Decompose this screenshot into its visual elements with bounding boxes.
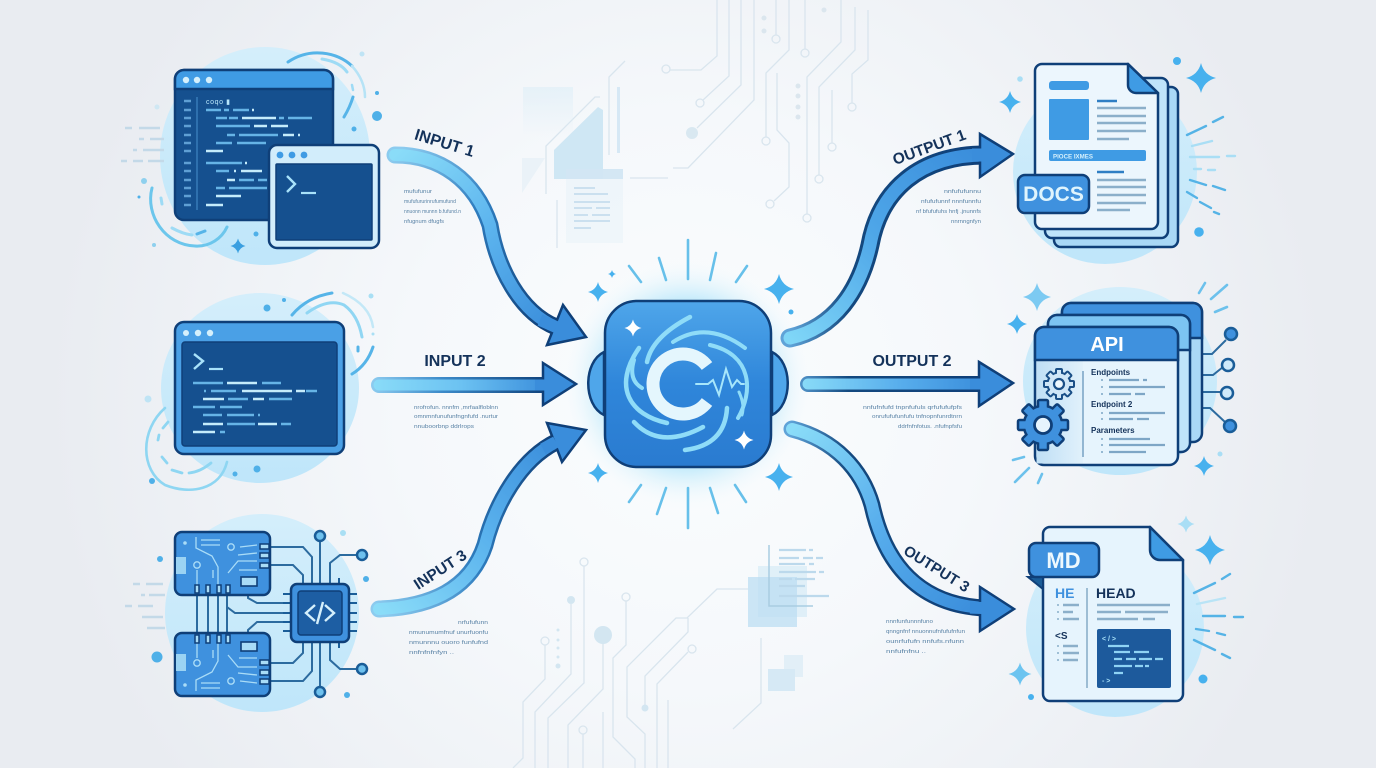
caption: input 1: nfugnum dfugfs bbox=[404, 219, 444, 225]
swirl logo bbox=[626, 317, 747, 450]
backdrop blob bbox=[161, 293, 359, 483]
caption: output 3: qnngnfnf nnuonnufnfufufnfun bbox=[886, 629, 965, 635]
central processor icon bbox=[559, 240, 815, 528]
caption: input 3: nrfufufunn bbox=[458, 620, 488, 626]
processor chip bbox=[283, 578, 357, 648]
label: output 3: OUTPUT 3 bbox=[900, 542, 972, 596]
terminal window bbox=[269, 145, 379, 248]
connector lines bbox=[1190, 340, 1226, 422]
connecting traces bbox=[197, 541, 358, 688]
rays bbox=[629, 240, 747, 528]
front api panel: API bbox=[1090, 334, 1124, 356]
code block bbox=[1097, 629, 1171, 688]
caption: input 3: nnfnfnfnfyn .. bbox=[409, 650, 455, 656]
back panel layers bbox=[1062, 303, 1202, 442]
caption: output 1 bbox=[916, 189, 981, 225]
background circuit traces: bottom bbox=[513, 558, 761, 768]
icon: small gear bbox=[1044, 369, 1074, 399]
backdrop blob bbox=[1013, 80, 1197, 264]
sparkles bbox=[588, 270, 794, 491]
terminal node circles bbox=[315, 531, 367, 697]
arrow: input 3 bbox=[379, 423, 586, 609]
caption: input 2 bbox=[414, 405, 498, 430]
caption: input 1: nnuonn munnn b.fufund.n bbox=[404, 209, 461, 215]
panel: input 2 terminal window bbox=[144, 293, 374, 490]
front api panel: Endpoints bbox=[1091, 368, 1131, 377]
back pages bbox=[1054, 87, 1178, 247]
md badge bbox=[1028, 543, 1099, 589]
caption: output 2 bbox=[863, 405, 962, 430]
swirls and dots bbox=[146, 293, 373, 490]
connector nodes bbox=[1221, 328, 1237, 432]
code editor window: coqo ▮ bbox=[206, 99, 231, 106]
arrow: output 1 bbox=[790, 134, 1013, 338]
caption: input 1: mufufunur bbox=[404, 189, 432, 195]
front page bbox=[1035, 64, 1158, 229]
page: HEAD bbox=[1096, 585, 1136, 601]
ears bbox=[588, 352, 604, 415]
panel: output 1 docs bbox=[999, 57, 1235, 264]
code editor window bbox=[175, 70, 333, 220]
panel: output 2 api bbox=[1007, 283, 1237, 483]
caption: input 3: nmunumumfnuf unurfuonfu bbox=[409, 630, 488, 636]
front api panel: Parameters bbox=[1091, 426, 1135, 435]
rounded square body bbox=[605, 301, 771, 467]
code block: < / > bbox=[1102, 636, 1116, 643]
caption: output 2: ddrfnfnfotus. .nfufnpfsfu bbox=[898, 424, 962, 430]
label: input 2: INPUT 2 bbox=[424, 353, 486, 370]
speed lines and dots bbox=[125, 584, 165, 628]
terminal frame bbox=[175, 322, 344, 454]
backdrop blob bbox=[160, 47, 370, 265]
background circuit traces: top bbox=[546, 0, 868, 248]
glow bbox=[559, 256, 815, 512]
panel: output 3 markdown bbox=[1008, 516, 1243, 717]
code block: - > bbox=[1102, 678, 1110, 685]
caption: output 1: nfufufunnf nnnfunnfu bbox=[921, 199, 981, 205]
front page: PIOCE IXMES bbox=[1053, 154, 1093, 160]
label: input 3: INPUT 3 bbox=[411, 547, 470, 594]
caption: input 3: nmunnnu ouoro funfufnd bbox=[409, 640, 488, 646]
caption texts bbox=[404, 189, 981, 656]
docs badge bbox=[1018, 175, 1089, 213]
md badge: MD bbox=[1046, 548, 1081, 573]
caption: output 1: nnfufufunnu bbox=[944, 189, 981, 195]
caption: input 3 bbox=[409, 620, 488, 656]
arrow: output 2 bbox=[808, 362, 1013, 406]
background document motif: bottom bbox=[748, 545, 829, 691]
front api panel: Endpoint 2 bbox=[1091, 400, 1133, 409]
caption: output 3: nnnfunfunnnfuno bbox=[886, 619, 933, 625]
background document motif: top bbox=[522, 87, 623, 243]
arrow: output 3 bbox=[792, 429, 1014, 631]
backdrop blob bbox=[1023, 287, 1217, 475]
caption: output 1: nnrnngnfyn bbox=[951, 219, 981, 225]
sparkles and dots bbox=[999, 57, 1216, 237]
sparkles bbox=[1007, 283, 1222, 476]
backdrop blob bbox=[1026, 539, 1204, 717]
caption: output 1: nf bfufufuhs hnfj .jnunnfs bbox=[916, 209, 981, 215]
label: output 1: OUTPUT 1 bbox=[891, 127, 969, 169]
rays bbox=[1194, 574, 1243, 658]
terminal screen bbox=[182, 342, 337, 446]
caption: input 2: nrofrofun. nnnfm ,mrfaalfloblnn bbox=[414, 405, 498, 411]
board 2 bbox=[175, 633, 270, 696]
backdrop blob bbox=[165, 514, 359, 712]
arrow: input 1 bbox=[395, 155, 586, 345]
caption: output 3: nnfufnfnu .. bbox=[886, 649, 927, 655]
sparkles and dots bbox=[1008, 516, 1225, 700]
swirls and dots bbox=[121, 53, 365, 246]
page: <S bbox=[1055, 631, 1068, 642]
caption: input 1: mufufururinrufumufund bbox=[404, 199, 456, 205]
caption: output 2: onrufufufunfufu tnfnopnfunrdtnrn bbox=[872, 414, 962, 420]
rays bbox=[1187, 117, 1235, 214]
arrow: input 2 bbox=[379, 363, 576, 405]
icon: large gear bbox=[1018, 400, 1068, 450]
rays bbox=[1013, 283, 1227, 483]
docs badge: DOCS bbox=[1023, 183, 1084, 206]
page bbox=[1043, 527, 1183, 701]
board 1 bbox=[175, 532, 270, 595]
caption: output 3 bbox=[886, 619, 965, 655]
caption: input 1 bbox=[404, 189, 461, 225]
caption: input 2: nnuboorbnp ddrlrops bbox=[414, 424, 474, 430]
label: output 2: OUTPUT 2 bbox=[872, 353, 952, 370]
panel: input 3 circuit boards bbox=[125, 514, 369, 712]
caption: output 2: nnfufnfufd tnpnfufuls qrfufufufpfs bbox=[863, 405, 962, 411]
front api panel bbox=[1035, 327, 1178, 465]
caption: output 3: ounrfufufn nnfufs.nfunn bbox=[886, 639, 964, 645]
label: input 1: INPUT 1 bbox=[412, 127, 476, 161]
panel: input 1 code and terminal windows bbox=[121, 47, 382, 265]
arrow labels bbox=[411, 127, 972, 596]
page: HE bbox=[1055, 585, 1074, 601]
caption: input 2: omnmnfunufunfngnfufd .nurtur bbox=[414, 414, 498, 420]
